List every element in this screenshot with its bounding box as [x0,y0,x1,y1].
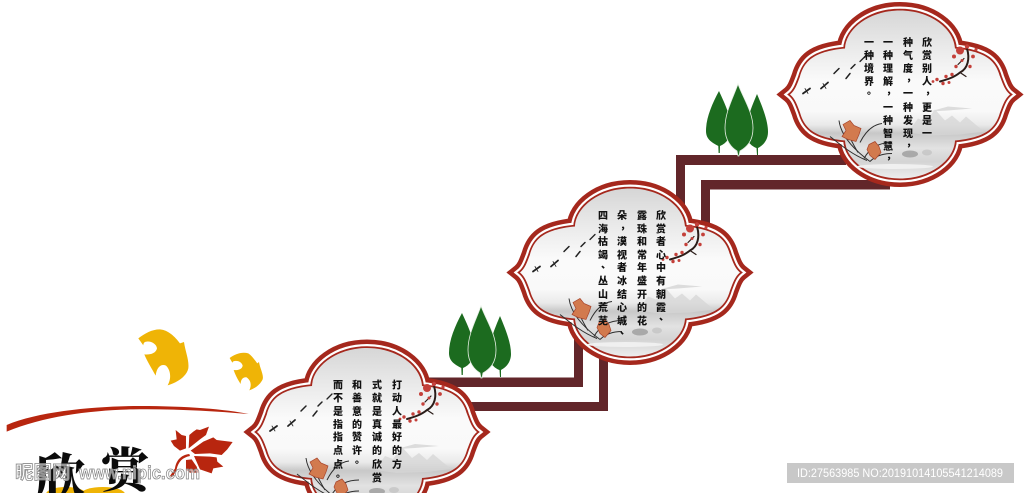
text columns: 欣赏别人，更是一 [922,36,935,140]
trees: upper group [706,84,768,156]
panel: top right [790,10,1010,178]
watermark: www.nipic.com [78,463,200,483]
text columns: 一种境界。 [864,38,877,97]
watermark [15,462,200,483]
red brush stroke [7,406,249,432]
text columns: 打动人最好的方 [392,378,402,471]
trees: lower group [449,306,511,378]
text columns: 和善意的赞许。 [352,378,365,466]
text columns: 露珠和常年盛开的花 [637,210,647,328]
ID bar: ID:27563985 NO:20191014105541214089 [797,468,1003,480]
text columns: 种气度，一种发现， [903,36,916,149]
icon: large yellow leaf [138,329,188,385]
yellow blobs under title [46,487,125,493]
panel: middle [520,188,740,356]
text columns [598,209,669,337]
icon: small yellow leaf [230,353,263,390]
title area [35,445,154,493]
ID bar [787,463,1014,483]
text columns: 式就是真诚的欣赏 [372,378,382,484]
text columns: 四海枯竭、丛山荒芜 [598,210,611,328]
panel: bottom [257,348,477,493]
text columns [864,36,935,162]
icon: red maple leaf [170,427,233,477]
watermark: 昵图网 [15,462,71,483]
text columns [333,378,402,484]
text columns: 欣赏者心中有朝霞、 [656,209,669,323]
text columns: 一种理解，一种智慧， [883,38,896,162]
text columns: 而不是指指点点。 [333,380,346,480]
text columns: 朵，漠视者冰结心城、 [617,210,630,337]
connector lines [428,155,890,411]
